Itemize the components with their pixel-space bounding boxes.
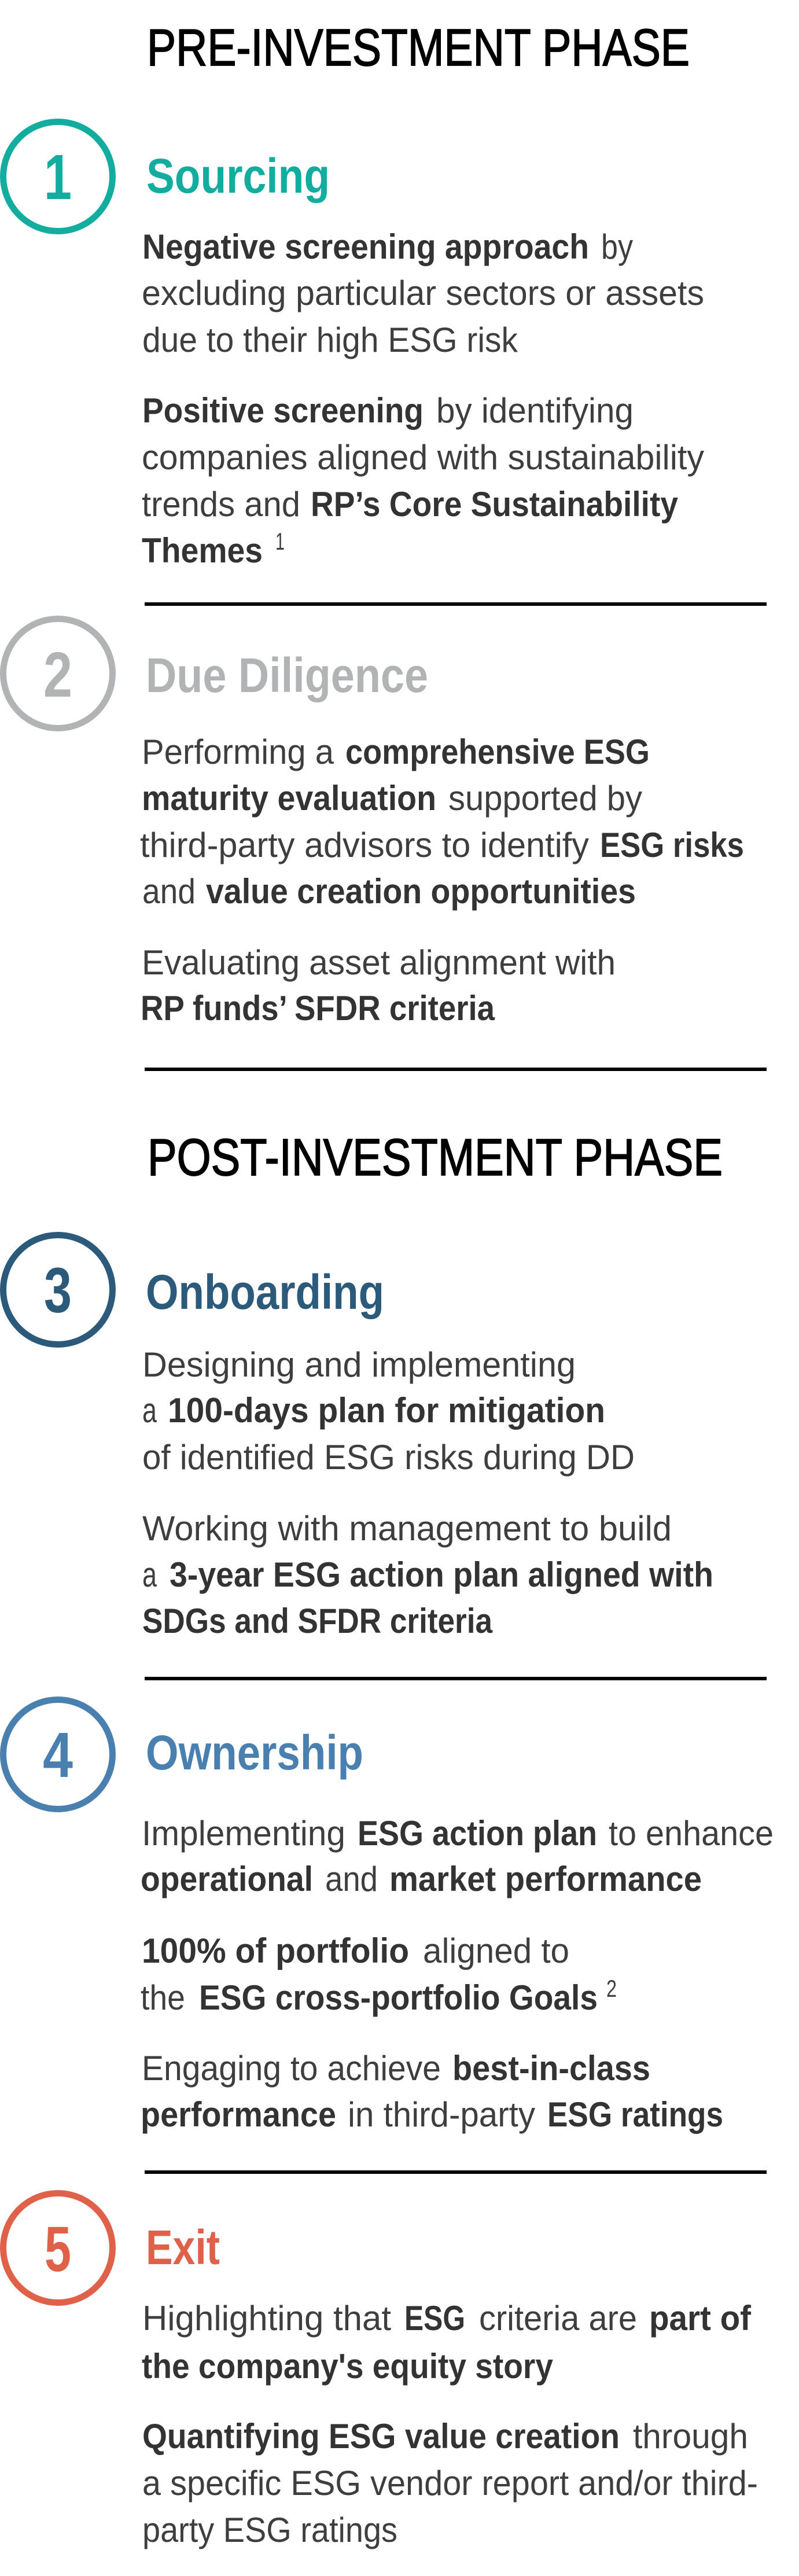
text block: positive screening: by identifying — [436, 391, 634, 430]
text block: action plan: to enhance — [609, 1814, 774, 1853]
text block: maturity evaluation: comprehensive ESG — [345, 733, 650, 771]
step title: Onboarding: Onboarding — [146, 1265, 384, 1319]
text block: cross-portfolio goals — [141, 1931, 617, 2017]
text block: 100-days plan: a — [142, 1391, 157, 1430]
panel: step 5 exit — [3, 2193, 758, 2549]
text block: equity story: the company's equity story — [142, 2347, 554, 2386]
text block: positive screening: companies aligned with sustainability — [142, 438, 704, 477]
text block: 100-days plan: Designing and implementing — [142, 1345, 576, 1384]
icon: number 2 circle — [3, 619, 112, 728]
text block: ESG ratings: performance — [141, 2095, 336, 2134]
text block: 3-year action plan — [142, 1509, 713, 1640]
text block: negative screening: due to their high ESG risk — [142, 321, 518, 359]
icon: number 4 circle — [3, 1700, 112, 1809]
text block: SFDR alignment: RP funds’ SFDR criteria — [141, 989, 495, 1028]
text block: positive screening — [142, 391, 704, 570]
text block: cross-portfolio goals: the — [141, 1978, 185, 2017]
text block: positive screening: Positive screening — [142, 391, 424, 430]
panel: step 3 onboarding — [3, 1235, 713, 1640]
text block: cross-portfolio goals: 2 — [606, 1975, 617, 2002]
text block: ESG ratings: best-in-class — [452, 2049, 650, 2088]
text block: value creation: party ESG ratings — [142, 2511, 397, 2549]
text block: value creation: through — [633, 2417, 748, 2456]
text block: 3-year action plan: a — [142, 1555, 157, 1594]
text block: 100-days plan: 100-days plan for mitigation — [168, 1391, 605, 1430]
text block: maturity evaluation — [140, 733, 744, 911]
text block: cross-portfolio goals: 100% of portfolio — [142, 1931, 409, 1970]
text block: value creation: a specific ESG vendor report and/or third- — [142, 2464, 758, 2503]
text block: maturity evaluation: supported by — [448, 779, 642, 818]
text block: positive screening: trends and — [142, 485, 300, 524]
text block: ESG ratings — [141, 2049, 723, 2134]
text block: 3-year action plan: 3-year ESG action plan aligned with — [170, 1555, 713, 1594]
text block: equity story: ESG — [404, 2299, 465, 2338]
panel: step 1 sourcing — [3, 122, 704, 570]
text block: 100-days plan — [142, 1345, 635, 1477]
text block: negative screening: by — [601, 227, 633, 266]
step title: Due Diligence: Due Diligence — [146, 648, 428, 702]
text block: value creation: Quantifying ESG value creation — [142, 2417, 620, 2456]
text block: maturity evaluation: third-party advisors to identify — [140, 826, 589, 864]
text block: ESG ratings: ESG ratings — [547, 2095, 723, 2134]
text block: 3-year action plan: SDGs and SFDR criteria — [142, 1602, 493, 1640]
icon: number 1 circle — [3, 122, 112, 231]
icon: number 5 circle: 5 — [45, 2214, 71, 2285]
text block: equity story — [142, 2299, 752, 2386]
icon: number 4 circle: 4 — [43, 1720, 73, 1791]
step title: Exit: Exit — [146, 2220, 220, 2275]
text block: ESG ratings: in third-party — [348, 2095, 535, 2134]
text block: action plan: ESG action plan — [358, 1814, 597, 1853]
icon: number 3 circle: 3 — [44, 1255, 72, 1326]
text block: maturity evaluation: and — [142, 872, 196, 911]
heading: pre-investment phase: PRE-INVESTMENT PHASE — [147, 19, 690, 77]
text block: positive screening: 1 — [275, 528, 285, 555]
text block: positive screening: Themes — [142, 531, 263, 570]
text block: 100-days plan: of identified ESG risks during DD — [142, 1438, 635, 1477]
step title: Sourcing: Sourcing — [146, 149, 330, 203]
text block: equity story: part of — [649, 2299, 752, 2338]
icon: number 1 circle: 1 — [44, 142, 72, 213]
text block: maturity evaluation: maturity evaluation — [142, 779, 436, 818]
text block: action plan: operational — [141, 1860, 313, 1898]
text block: maturity evaluation: value creation opportunities — [206, 872, 636, 911]
icon: number 3 circle — [3, 1235, 112, 1345]
text block: cross-portfolio goals: aligned to — [423, 1931, 569, 1970]
text block: maturity evaluation: ESG risks — [600, 826, 744, 864]
panel: step 2 due diligence — [3, 619, 744, 1028]
text block: SFDR alignment — [141, 943, 616, 1028]
text block: action plan: Implementing — [142, 1814, 345, 1853]
text block: value creation — [142, 2417, 758, 2549]
text block: maturity evaluation: Performing a — [142, 733, 334, 771]
text block: 3-year action plan: Working with management to build — [142, 1509, 672, 1548]
text block: action plan — [141, 1814, 774, 1898]
text block: equity story: criteria are — [479, 2299, 637, 2338]
text block: positive screening: RP’s Core Sustainability — [311, 485, 679, 524]
text block: cross-portfolio goals: ESG cross-portfolio Goals — [199, 1978, 598, 2017]
text block: ESG ratings: Engaging to achieve — [142, 2049, 441, 2088]
icon: number 5 circle — [3, 2193, 112, 2303]
text block: negative screening: excluding particular sectors or assets — [142, 274, 704, 312]
text block: negative screening — [142, 227, 704, 359]
step title: Ownership: Ownership — [146, 1725, 363, 1780]
text block: SFDR alignment: Evaluating asset alignment with — [142, 943, 616, 982]
text block: action plan: market performance — [389, 1860, 702, 1898]
text block: action plan: and — [325, 1860, 378, 1898]
text block: negative screening: Negative screening approach — [142, 227, 589, 266]
text block: equity story: Highlighting that — [142, 2299, 391, 2338]
icon: number 2 circle: 2 — [43, 639, 72, 711]
panel: step 4 ownership — [3, 1700, 774, 2134]
